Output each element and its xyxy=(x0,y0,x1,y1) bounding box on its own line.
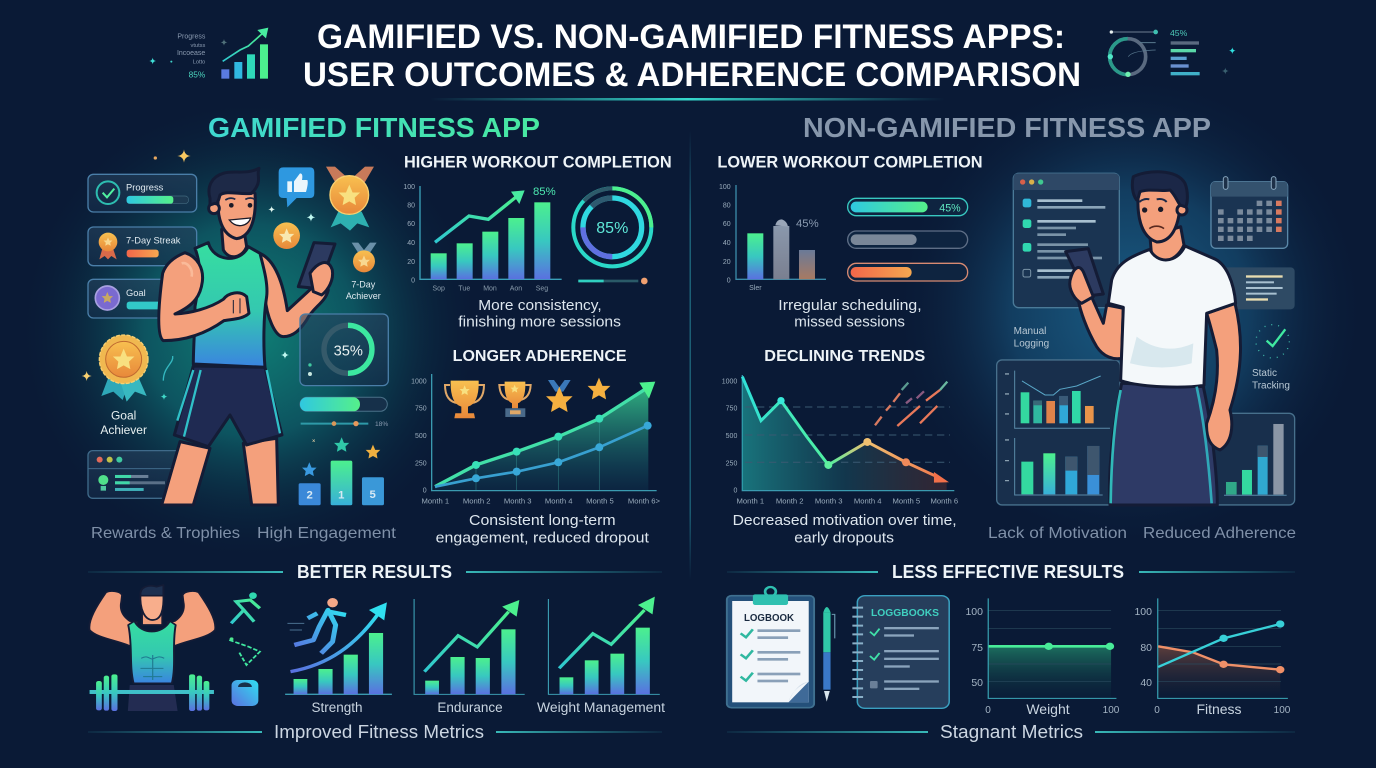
progress bar xyxy=(300,397,388,428)
heading: lower workout completion: LOWER WORKOUT COMPLETION xyxy=(717,153,983,172)
panel: non-gamified character and tools xyxy=(997,172,1295,505)
icon: medal xyxy=(326,167,374,231)
icon: logbook clipboard: LOGBOOK xyxy=(744,613,795,624)
leaderboard podium: × xyxy=(312,439,315,445)
badge: 7-day achiever: Achiever xyxy=(346,291,381,301)
bar chart: completion: Sop xyxy=(432,285,445,292)
line chart: adherence: Month 1 xyxy=(421,496,449,505)
top-left progress decoration: Incoease xyxy=(177,50,205,57)
top-left progress decoration: vtutss xyxy=(191,43,205,49)
illustration: muscular lifter xyxy=(89,585,215,711)
line chart: declining xyxy=(722,375,958,505)
panel: gamified character and rewards xyxy=(82,149,388,505)
line chart: weight: 100 xyxy=(965,606,983,618)
bar chart: low completion: Sler xyxy=(749,285,762,292)
line chart: adherence: Month 2 xyxy=(463,496,490,505)
leaderboard podium xyxy=(299,437,384,505)
line chart: weight: 100 xyxy=(1103,705,1120,716)
label: manual logging xyxy=(1014,326,1049,350)
icon: static tracking clock: Tracking xyxy=(1252,381,1290,392)
bar chart: completion: Mon xyxy=(483,285,497,292)
panel: better results xyxy=(88,562,665,742)
title: GAMIFIED VS. NON-GAMIFIED FITNESS APPS: xyxy=(317,18,1065,56)
bar chart: completion: 85% xyxy=(533,186,556,198)
caption: long-term engagement: Consistent long-term xyxy=(469,513,616,529)
bar chart: completion: 80 xyxy=(407,202,415,209)
icon: static tracking clock xyxy=(1252,325,1290,392)
icon: logbooks notebook xyxy=(852,596,949,708)
badge: goal achiever: Goal xyxy=(111,408,136,422)
line chart: adherence: Month 5 xyxy=(586,496,614,505)
icon: star coin xyxy=(273,222,300,249)
caption: decreased motivation: early dropouts xyxy=(794,530,894,546)
line chart: fitness: 40 xyxy=(1140,677,1152,689)
line chart: adherence: 1000 xyxy=(411,379,427,386)
heading: better results: BETTER RESULTS xyxy=(297,562,452,582)
bar chart: completion: Aon xyxy=(510,285,522,292)
line chart: adherence: Month 4 xyxy=(545,496,573,505)
heading: higher workout completion: HIGHER WORKOUT COMPLETION xyxy=(404,153,672,172)
line chart: weight: 0 xyxy=(985,705,991,716)
card: bar charts left xyxy=(997,360,1120,505)
bar chart: low completion: 100 xyxy=(719,184,731,191)
label: lack of motivation: Lack of Motivation xyxy=(988,525,1127,542)
card: manual log window xyxy=(1013,173,1119,308)
top-left progress decoration xyxy=(149,28,268,79)
top-left progress decoration: Progress xyxy=(177,33,206,40)
heading: longer adherence: LONGER ADHERENCE xyxy=(453,348,627,365)
bar chart: completion: 20 xyxy=(407,259,415,266)
bar chart: low completion: 45% xyxy=(796,218,819,230)
card: app window xyxy=(88,451,181,498)
badge: goal achiever xyxy=(99,335,148,437)
caption: consistency: finishing more sessions xyxy=(458,315,621,331)
label: improved fitness metrics: Improved Fitness Metrics xyxy=(274,722,484,742)
line chart: declining: Month 2 xyxy=(776,496,803,505)
caption: irregular scheduling: missed sessions xyxy=(794,315,905,331)
bar chart: completion: 60 xyxy=(407,221,415,228)
line chart: adherence: 0 xyxy=(423,487,427,494)
line chart: declining: 1000 xyxy=(722,379,737,386)
bar chart: low completion: 60 xyxy=(723,221,731,228)
bar chart: low completion xyxy=(719,184,826,292)
caption: decreased motivation: Decreased motivation over time, xyxy=(733,513,957,529)
leaderboard podium: 5 xyxy=(369,489,376,501)
icon: static tracking clock: Static xyxy=(1252,368,1277,379)
bar chart: completion: 100 xyxy=(403,184,415,191)
top-left progress decoration: 85% xyxy=(189,69,206,79)
leaderboard podium: 2 xyxy=(306,490,313,502)
badge: goal achiever: Achiever xyxy=(100,423,147,437)
badge: 7-day achiever: 7-Day xyxy=(351,280,376,290)
panel: less effective results xyxy=(727,562,1295,742)
mini chart: weight management: Weight Management xyxy=(537,700,665,715)
top-left progress decoration: Lotto xyxy=(193,59,205,65)
label: high engagement: High Engagement xyxy=(257,525,397,542)
label: manual logging: Manual xyxy=(1014,326,1046,337)
progress pills: 45% xyxy=(939,202,961,214)
mini chart: weight management xyxy=(537,597,665,715)
icon: logbooks notebook: LOGGBOOKS xyxy=(871,607,939,619)
character: gamified user xyxy=(159,168,335,505)
label: manual logging: Logging xyxy=(1014,339,1049,350)
bar chart: completion: 0 xyxy=(411,277,415,284)
caption: irregular scheduling: Irregular scheduling, xyxy=(778,298,922,314)
line chart: weight xyxy=(965,598,1120,717)
line chart: declining: 750 xyxy=(726,406,737,413)
heading: gamified: GAMIFIED FITNESS APP xyxy=(208,112,540,143)
line chart: declining: 0 xyxy=(733,487,737,494)
ring chart: 85%: 85% xyxy=(596,220,628,237)
bar chart: low completion: 20 xyxy=(723,259,731,266)
badge: 7-day achiever xyxy=(346,243,381,301)
mini chart: strength xyxy=(285,598,392,715)
caption: long-term engagement: engagement, reduced dropout xyxy=(436,530,649,546)
top-right stats decoration: 45% xyxy=(1170,28,1188,38)
bar chart: completion: Seg xyxy=(536,285,548,292)
card: notes xyxy=(1223,267,1295,309)
line chart: declining: Month 1 xyxy=(736,496,764,505)
mini chart: endurance xyxy=(414,599,525,715)
ring chart: 85% xyxy=(573,188,651,284)
progress pills xyxy=(848,198,968,281)
line chart: adherence: 500 xyxy=(415,433,427,440)
card: 7-day streak: 7-Day Streak xyxy=(126,235,181,245)
label: rewards & trophies: Rewards & Trophies xyxy=(91,525,240,542)
line chart: adherence: 250 xyxy=(415,460,427,467)
line chart: fitness: 80 xyxy=(1140,642,1152,654)
caption: long-term engagement xyxy=(436,513,649,546)
line chart: declining: Month 5 xyxy=(892,496,920,505)
progress bar: 18% xyxy=(375,421,388,428)
title: USER OUTCOMES & ADHERENCE COMPARISON xyxy=(303,56,1081,94)
card: progress: Progress xyxy=(126,183,164,193)
bar chart: low completion: 0 xyxy=(727,277,731,284)
leaderboard podium: 1 xyxy=(338,490,344,502)
mini chart: strength: Strength xyxy=(311,700,363,715)
icons: runner, agility, scale xyxy=(229,592,260,706)
panel: lower completion and decline xyxy=(717,153,983,546)
line chart: declining: 500 xyxy=(726,433,737,440)
icon: calendar xyxy=(1211,177,1288,248)
icons: trophies and stars xyxy=(445,378,610,418)
bar chart: low completion: 40 xyxy=(723,240,731,247)
line chart: weight: 50 xyxy=(971,677,983,689)
card: bar chart right xyxy=(1210,413,1295,505)
bar chart: completion: 40 xyxy=(407,240,415,247)
line chart: weight: Weight xyxy=(1026,701,1070,717)
line chart: declining: 250 xyxy=(726,460,737,467)
panel: higher completion and adherence xyxy=(403,153,672,546)
character: non-gamified user xyxy=(1066,172,1241,505)
bar chart: completion: Tue xyxy=(458,285,470,292)
bar chart: low completion: 80 xyxy=(723,202,731,209)
caption: decreased motivation xyxy=(733,513,957,546)
card: progress ring 35% xyxy=(300,314,388,386)
label: reduced adherence: Reduced Adherence xyxy=(1143,525,1296,542)
card: 7-day streak xyxy=(88,227,197,266)
caption: consistency: More consistency, xyxy=(478,298,602,314)
bar chart: completion xyxy=(403,184,562,292)
caption: consistency xyxy=(458,298,621,331)
line chart: adherence: Month 3 xyxy=(504,496,531,505)
icon: logbook clipboard xyxy=(727,587,814,708)
line chart: adherence xyxy=(411,374,661,505)
top-right stats decoration xyxy=(1108,28,1236,77)
heading: non-gamified: NON-GAMIFIED FITNESS APP xyxy=(803,112,1211,143)
line chart: fitness xyxy=(1134,598,1291,717)
mini chart: endurance: Endurance xyxy=(437,700,503,715)
line chart: fitness: 100 xyxy=(1134,606,1152,618)
line chart: declining: Month 4 xyxy=(854,496,882,505)
line chart: fitness: 0 xyxy=(1154,705,1160,716)
icon: thumbs up xyxy=(279,167,314,207)
line chart: adherence: 750 xyxy=(415,406,427,413)
line chart: weight: 75 xyxy=(971,642,983,654)
card: progress xyxy=(88,174,197,212)
line chart: declining: Month 3 xyxy=(815,496,842,505)
line chart: fitness: 100 xyxy=(1274,705,1291,716)
heading: less effective results: LESS EFFECTIVE RESULTS xyxy=(892,562,1124,582)
label: stagnant metrics: Stagnant Metrics xyxy=(940,722,1083,742)
card: goal xyxy=(88,279,197,318)
line chart: declining: Month 6 xyxy=(930,496,958,505)
card: progress ring 35%: 35% xyxy=(334,343,363,359)
icon: pen xyxy=(823,607,835,702)
line chart: adherence: Month 6> xyxy=(628,496,661,505)
caption: irregular scheduling xyxy=(778,298,922,331)
title xyxy=(303,18,1081,94)
line chart: fitness: Fitness xyxy=(1196,701,1242,717)
card: goal: Goal xyxy=(126,288,146,298)
heading: declining trends: DECLINING TRENDS xyxy=(764,348,925,365)
